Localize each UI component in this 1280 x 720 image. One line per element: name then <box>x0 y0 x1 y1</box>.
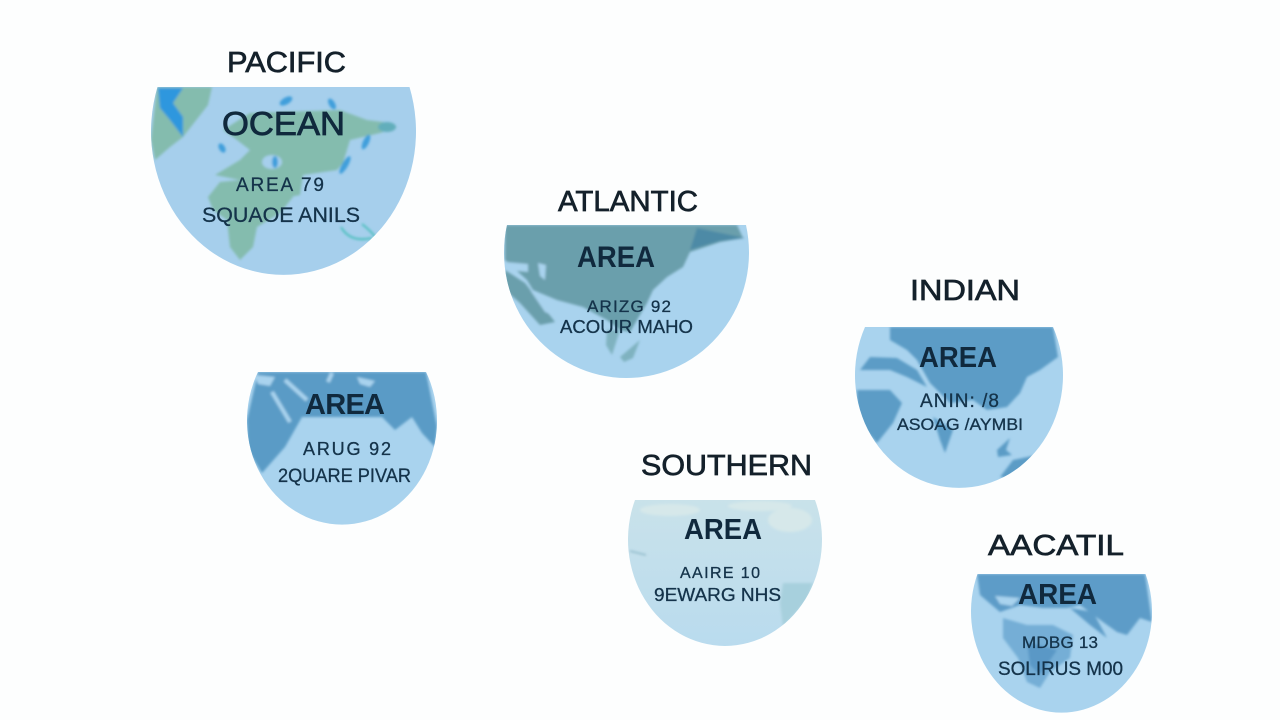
label: area unit: 9EWARG NHS <box>654 585 781 605</box>
land: southwest coast <box>505 270 555 325</box>
label: area value: ANIN: /8 <box>920 391 999 412</box>
land: Asia <box>505 225 743 332</box>
panel: Indian <box>853 275 1065 490</box>
map: Pacific bowl <box>150 86 418 276</box>
label: area value: AAIRE 10 <box>680 565 760 582</box>
land: top-left continent <box>151 87 212 160</box>
water: light blobs <box>255 375 375 387</box>
land: island <box>620 340 640 362</box>
label: Ocean: OCEAN <box>222 105 345 142</box>
islands: blue accents <box>217 94 372 175</box>
label: Area: AREA <box>305 389 385 421</box>
water: light inlets <box>508 261 548 314</box>
label: area value: ARIZG 92 <box>587 297 671 316</box>
land: dark interior <box>1027 642 1057 675</box>
land: southwest landmass <box>857 390 902 443</box>
label: area unit: SQUAOE ANILS <box>202 204 360 227</box>
label: area unit: SOLIRUS M00 <box>998 659 1123 680</box>
label: Area: AREA <box>919 342 997 374</box>
panel: Aacatil <box>969 530 1154 715</box>
map: lower-left bowl <box>245 371 439 527</box>
heading: Aacatil: AACATIL <box>988 530 1124 562</box>
land: northern landmass <box>247 372 437 473</box>
label: area unit: ACOUIR MAHO <box>560 317 693 337</box>
land: South America <box>1003 618 1073 688</box>
land: northern landmass <box>977 574 1152 635</box>
land: small islands <box>997 438 1012 457</box>
label: area unit: ASOAG /AYMBI <box>897 415 1023 434</box>
map: Southern bowl <box>626 499 824 648</box>
label: Area: AREA <box>577 241 655 274</box>
land: Africa <box>208 180 293 260</box>
panel: unnamed lower left <box>245 371 439 527</box>
label: area value: MDBG 13 <box>1022 633 1098 652</box>
accent: eastern peninsula <box>378 122 396 132</box>
land: Eurasia <box>215 110 397 197</box>
map: Aacatil bowl <box>969 573 1154 715</box>
land: southeast peninsula <box>606 330 620 355</box>
map: Indian bowl <box>853 326 1065 490</box>
land: peninsula <box>1070 608 1107 638</box>
land: western band <box>860 357 927 387</box>
heading: Indian: INDIAN <box>910 275 1020 307</box>
land: southeast shelf <box>780 583 813 627</box>
accent: teal ring <box>341 224 376 239</box>
clouds: upper haze <box>640 501 812 532</box>
land: peninsula <box>933 417 953 453</box>
mark: left coast <box>630 551 646 555</box>
label: area value: AREA 79 <box>236 175 324 196</box>
panel: Atlantic <box>503 186 751 380</box>
heading: Atlantic: ATLANTIC <box>558 186 698 218</box>
land: southeast island <box>1000 455 1037 478</box>
water: inland sea <box>262 155 282 169</box>
water: light streaks <box>272 373 332 422</box>
heading: Pacific: PACIFIC <box>227 47 346 79</box>
heading: Southern: SOUTHERN <box>641 450 812 482</box>
map: Atlantic bowl <box>503 224 751 380</box>
panel: Southern <box>626 450 824 648</box>
label: Area: AREA <box>1018 579 1097 611</box>
water: light inlet <box>995 596 1020 606</box>
label: Area: AREA <box>684 514 762 546</box>
label: area value: ARUG 92 <box>303 439 391 459</box>
water: blue inlet <box>158 88 183 137</box>
panel: Pacific <box>150 47 418 276</box>
land: dark northern coast <box>690 228 745 250</box>
land: northern landmass <box>890 327 1058 410</box>
label: area unit: 2QUARE PIVAR <box>278 466 411 487</box>
